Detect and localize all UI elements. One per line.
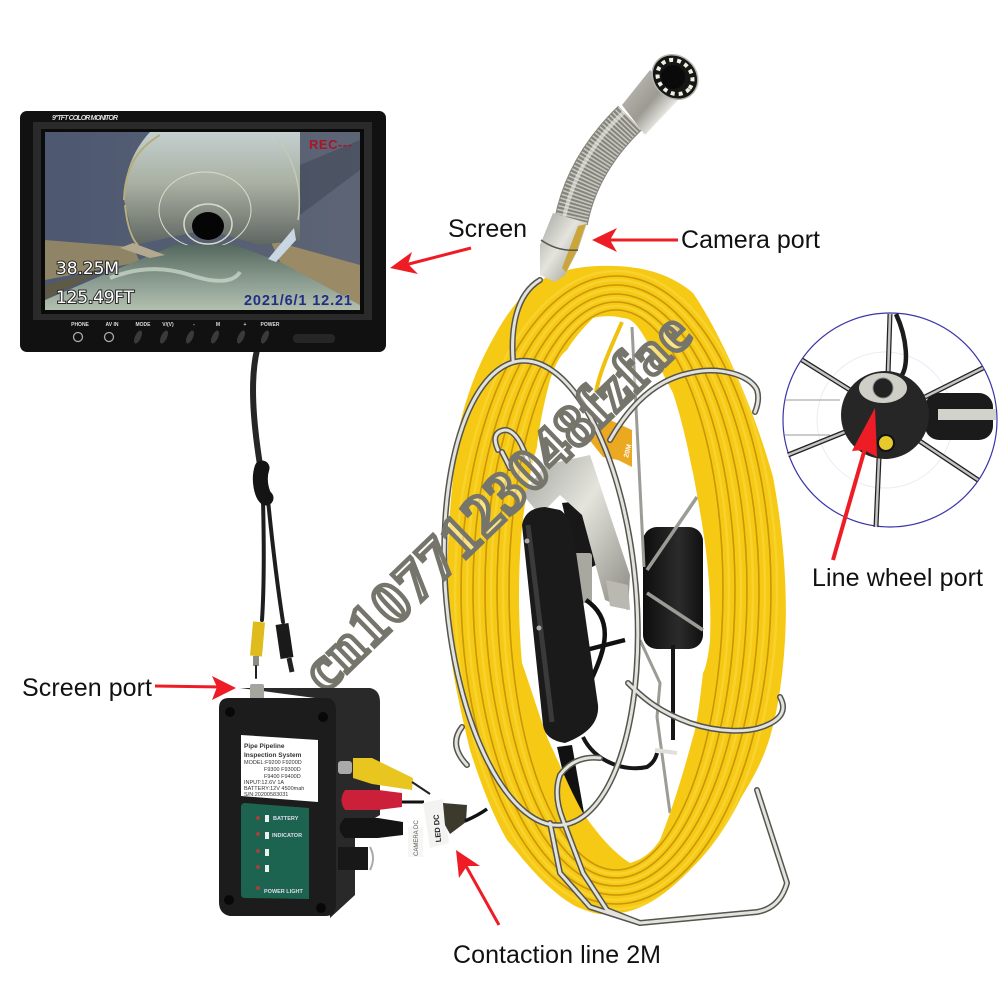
box label: BATTERY:12V 4500mah	[244, 786, 304, 792]
reel: black hub behind plate	[562, 500, 606, 568]
screen port connector	[250, 684, 264, 700]
box label: S/N:20200583031	[244, 792, 288, 798]
monitor	[20, 111, 386, 352]
label: screen port: Screen port	[22, 674, 152, 702]
camera probe	[540, 45, 707, 282]
reel: yellow cable coil	[447, 266, 786, 914]
monitor control buttons	[71, 322, 335, 345]
screen overlay text: 38.25M	[56, 259, 119, 279]
box indicator panel	[241, 803, 309, 899]
reel: connector and cables	[572, 553, 630, 678]
reel: black handle	[522, 507, 598, 743]
screen image of pipe: 2021/6/1 12.21	[244, 293, 352, 309]
box label: MODEL:F9200 F9200D	[244, 760, 302, 766]
label: contaction line: Contaction line 2M	[453, 941, 661, 969]
reel: small strand in hole	[596, 322, 622, 392]
camera head	[643, 45, 707, 109]
box label: INPUT:12.6V 1A	[244, 780, 284, 786]
screen image of pipe: REC---	[309, 137, 352, 152]
box indicator panel: INDICATOR	[272, 833, 302, 839]
arrows	[155, 228, 877, 925]
label: camera port: Camera port	[681, 226, 820, 254]
watermark: cn1077123048fzfae	[289, 300, 703, 703]
arrow: camera port	[592, 228, 678, 252]
monitor control buttons: MODE	[136, 322, 151, 328]
cable tags	[408, 799, 487, 857]
box side and top	[240, 688, 380, 918]
screen image of pipe: 125.49FT	[56, 288, 135, 308]
arrow: line wheel port	[833, 408, 877, 560]
box indicator panel: BATTERY	[273, 816, 299, 822]
reel: steel wire stand	[426, 280, 787, 923]
arrow: screen	[390, 248, 471, 274]
box indicator panel: POWER LIGHT	[264, 889, 303, 895]
box label	[241, 735, 318, 802]
gooseneck	[564, 112, 630, 222]
reel: orange tag	[587, 420, 633, 467]
line wheel port inset	[783, 313, 997, 527]
monitor: 9"TFT COLOR MONITOR	[52, 115, 118, 122]
monitor cable and connectors	[253, 350, 292, 678]
cable tags: LED DC	[432, 813, 443, 843]
monitor control buttons: PHONE	[71, 322, 90, 328]
ferrule	[540, 213, 587, 282]
box front	[219, 698, 336, 916]
box label: Inspection System	[244, 752, 302, 759]
side plugs	[338, 758, 430, 870]
labels	[22, 215, 983, 969]
reel: orange tag: 20M	[623, 443, 633, 459]
camera barrel	[622, 70, 678, 135]
monitor control buttons: M	[216, 322, 220, 328]
control box	[219, 684, 487, 918]
monitor control buttons: V/(V)	[162, 322, 174, 328]
monitor control buttons: -	[193, 322, 195, 328]
monitor control buttons: +	[244, 322, 247, 328]
monitor control buttons: AV IN	[106, 322, 119, 328]
monitor control buttons: POWER	[261, 322, 280, 328]
screen image of pipe	[45, 132, 360, 310]
arrow: contaction line	[456, 850, 499, 925]
reel: rear hub, wires and cables	[557, 327, 703, 813]
label: line wheel port: Line wheel port	[812, 564, 983, 592]
box label: F9300 F9300D	[264, 767, 301, 773]
box label: F9400 F9400D	[264, 774, 301, 780]
box label: Pipe Pipeline	[244, 743, 285, 750]
reel: steel arm plate	[523, 455, 630, 610]
label: screen: Screen	[448, 215, 527, 243]
arrow: screen port	[155, 676, 236, 700]
cable tags: CAMERA DC	[414, 820, 420, 856]
